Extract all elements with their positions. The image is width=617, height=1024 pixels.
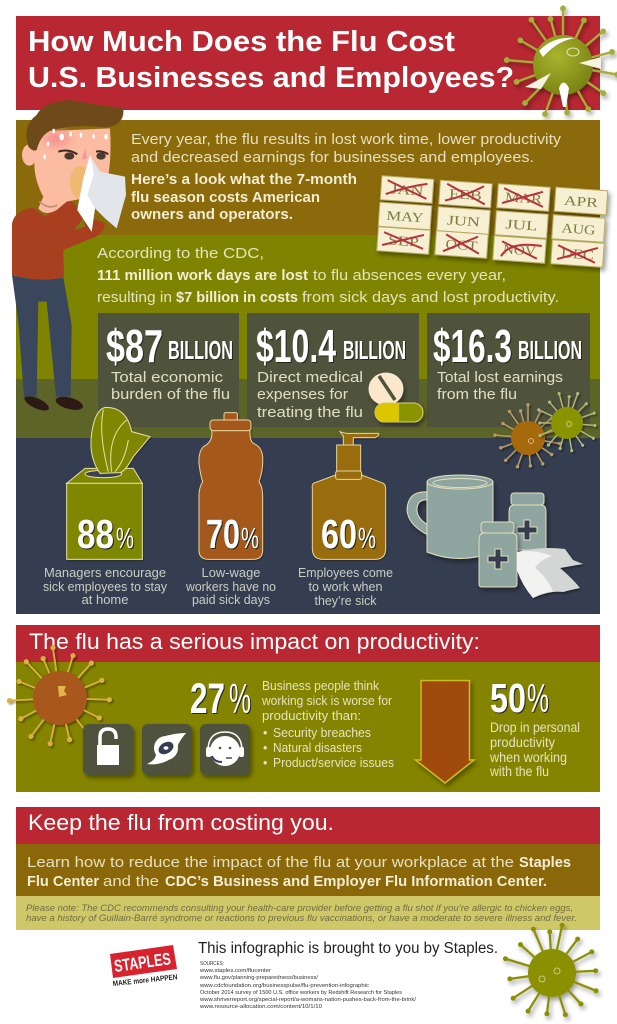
CDC text: resulting in [97, 289, 172, 306]
panel: CDC statistics [16, 235, 600, 438]
text: business people think: working sick is worse for [261, 694, 392, 708]
call to action: Flu Center [27, 873, 99, 890]
text: business people think: Security breaches [273, 726, 371, 740]
CDC text: from sick days and lost productivity. [302, 289, 559, 306]
stat description: burden of the flu [111, 387, 230, 403]
month card: MAR [497, 184, 550, 211]
month card: APR: APR [563, 193, 598, 210]
stat: 50 percent: 50 [490, 675, 526, 721]
item: soap dispenser [312, 432, 386, 559]
shoes [22, 393, 84, 413]
medicine bottle back [509, 493, 546, 550]
icon: green virus [529, 383, 606, 459]
panel: $16.3 billion [427, 313, 590, 427]
text: drop in productivity: Drop in personal [490, 720, 580, 735]
stat description [437, 370, 563, 403]
section heading band [16, 807, 600, 844]
month card: FEB: FEB [448, 186, 482, 203]
stat description [257, 370, 363, 421]
title banner [16, 16, 600, 110]
month card: NOV: NOV [502, 241, 537, 259]
text: business people think: • [263, 726, 267, 740]
text: business people think: productivity than: [262, 709, 361, 723]
stat unit: billion: BILLION [168, 335, 233, 365]
call to action: Staples [519, 854, 571, 871]
panel: productivity [16, 625, 600, 792]
Staples logo [110, 945, 178, 988]
stat: 27 percent: % [229, 675, 251, 722]
month card: MAY: MAY [386, 208, 424, 225]
month card: NOV [493, 236, 546, 263]
stat description: Total lost earnings [437, 370, 563, 386]
section heading band [16, 625, 600, 662]
title text: How Much Does the Flu Cost [28, 26, 455, 58]
icon: virus in title [507, 8, 617, 114]
man sneezing illustration [12, 100, 126, 413]
stat unit: billion: BILLION [343, 335, 406, 365]
intro text: Every year, the flu results in lost work time, lower productivity [131, 131, 562, 148]
stat: 50 percent: % [527, 677, 549, 721]
bold intro text: flu season costs American [131, 190, 320, 206]
CDC text: $7 billion in costs [176, 289, 298, 306]
Staples logo: MAKE more HAPPEN [112, 972, 178, 988]
sources: SOURCES: [200, 961, 224, 967]
call to action: and the [103, 873, 159, 890]
bold intro text [131, 172, 357, 223]
caption: employees [298, 566, 393, 608]
month card: DEC [551, 240, 604, 267]
stat description: expenses for [257, 387, 348, 403]
text: business people think: Business people think [262, 679, 380, 693]
month card: MAR: MAR [504, 189, 542, 207]
text: drop in productivity: productivity [490, 735, 555, 750]
text: drop in productivity [489, 720, 580, 779]
icon: pills [368, 372, 423, 422]
caption: managers [43, 566, 168, 607]
icon: hurricane [142, 724, 192, 775]
caption: managers: Managers encourage [44, 566, 166, 580]
stat: 88 percent: 88 [77, 511, 114, 557]
vaccination note: have a history of Guillain-Barré syndrome or reactions to previous flu vaccinations, or have a moderate to severe illness and fever. [26, 913, 577, 924]
CDC text: to flu absences every year, [313, 267, 506, 284]
section heading: Keep the flu from costing you. [28, 810, 334, 835]
calendar months [377, 176, 608, 267]
sources: www.flu.gov/planning-preparedness/business/ [199, 975, 318, 981]
month card: AUG: AUG [561, 220, 596, 238]
stat description [111, 370, 230, 403]
month card: DEC: DEC [560, 245, 594, 263]
icon: open padlock [83, 724, 133, 775]
call to action: CDC’s Business and Employer Flu Information Center. [165, 873, 547, 890]
caption: employees: to work when [308, 580, 383, 594]
mug [407, 475, 493, 558]
text: drop in productivity: with the flu [489, 764, 549, 779]
sources: www.staples.com/flucenter [199, 968, 271, 974]
month card: JAN [380, 176, 434, 203]
month card: JAN: JAN [390, 181, 424, 199]
month card: JUN: JUN [446, 212, 481, 230]
stat description: Direct medical [257, 370, 363, 386]
sources: www.cdcfoundation.org/businesspulse/flu-prevention-infographic [199, 983, 369, 989]
illustration: mug, medicine and tissue [407, 475, 583, 598]
intro text [131, 131, 562, 166]
panel: keep the flu from costing you [16, 807, 600, 930]
text: business people think [261, 679, 394, 770]
panel: $87 billion [98, 313, 239, 427]
CDC text: 111 million work days are lost [97, 267, 308, 284]
caption: low-wage workers: paid sick days [192, 593, 270, 607]
month card: JUL: JUL [505, 216, 538, 234]
month card: SEP: SEP [387, 232, 419, 250]
medicine bottle front [479, 522, 517, 587]
month card: OCT: OCT [445, 236, 479, 254]
section heading: The flu has a serious impact on productivity: [29, 629, 480, 654]
month card: FEB [439, 180, 492, 208]
stat: 27 percent: 27 [190, 675, 225, 723]
text: business people think: Natural disasters [273, 741, 362, 755]
caption: low-wage workers [185, 566, 276, 607]
stat: $10.4: $10.4 [256, 320, 336, 372]
stat: 60 percent: % [358, 523, 376, 555]
icon: footer virus [496, 915, 608, 1024]
vaccination note: Please note: The CDC recommends consulting your health-care provider before getting a flu shot if you’re allergic to chicken eggs, [26, 903, 573, 914]
head [22, 100, 123, 213]
bold intro text: Here’s a look what the 7-month [131, 172, 357, 188]
sweater [12, 198, 105, 279]
crumpled tissue [517, 548, 583, 598]
stat: 60 percent: 60 [321, 511, 357, 557]
month card: OCT [435, 231, 488, 258]
trousers [12, 275, 72, 397]
sources [199, 961, 416, 1010]
stat: 70 percent: 70 [206, 511, 240, 557]
month card: AUG [552, 215, 605, 242]
icon: orange virus [3, 641, 114, 749]
stat description: Total economic [111, 370, 223, 386]
panel: $10.4 billion [247, 313, 419, 427]
caption: low-wage workers: Low-wage [202, 566, 261, 580]
item: tissue box [67, 407, 150, 559]
stat: 70 percent: % [241, 523, 259, 555]
handkerchief [77, 155, 126, 232]
sources: www.shriverreport.org/special-report/a-womans-nation-pushes-back-from-the-brink/ [199, 997, 416, 1003]
call to action [27, 854, 571, 890]
bold intro text: owners and operators. [131, 207, 293, 223]
arrow: productivity drop [416, 680, 474, 783]
stat: 88 percent: % [116, 523, 134, 555]
title text: U.S. Businesses and Employees? [28, 62, 514, 94]
icon: brown virus [495, 405, 560, 467]
sponsor line: This infographic is brought to you by Staples. [198, 940, 498, 957]
call to action: Learn how to reduce the impact of the flu at your workplace at the [27, 854, 514, 871]
caption: employees: Employees come [298, 566, 393, 580]
hand [70, 166, 90, 199]
text: business people think: • [263, 741, 267, 755]
text: business people think: • [263, 756, 267, 770]
item: sports bottle [199, 413, 263, 559]
sources: October 2014 survey of 1500 U.S. office workers by Redshift Research for Staples [200, 990, 402, 996]
CDC text: According to the CDC, [97, 245, 264, 262]
month card: JUN [437, 207, 490, 234]
stat description: treating the flu [257, 405, 363, 421]
month card: APR [554, 187, 608, 215]
intro text: and decreased earnings for businesses and employees. [131, 149, 534, 166]
text: drop in productivity: when working [489, 750, 567, 765]
Staples logo: STAPLES [113, 949, 172, 976]
caption: employees: they’re sick [314, 594, 377, 608]
panel: navy items background [16, 438, 600, 614]
text: business people think: Product/service issues [273, 756, 394, 770]
panel: flu season intro [16, 120, 600, 235]
stat: $87: $87 [106, 320, 163, 372]
month card: MAY [378, 202, 432, 230]
stat description: from the flu [437, 387, 517, 403]
CDC text [97, 245, 559, 306]
caption: managers: sick employees to stay [43, 580, 168, 594]
title text [28, 26, 514, 94]
month card: JUL [495, 211, 548, 238]
vaccination note [26, 903, 577, 924]
sources: www.resource-allocation.com/content/10/1/10 [199, 1004, 322, 1010]
caption: managers: at home [82, 593, 129, 607]
icon: headset support [200, 724, 250, 775]
month card: SEP [377, 227, 430, 254]
caption: low-wage workers: workers have no [185, 580, 276, 594]
stat: $16.3: $16.3 [433, 320, 512, 372]
